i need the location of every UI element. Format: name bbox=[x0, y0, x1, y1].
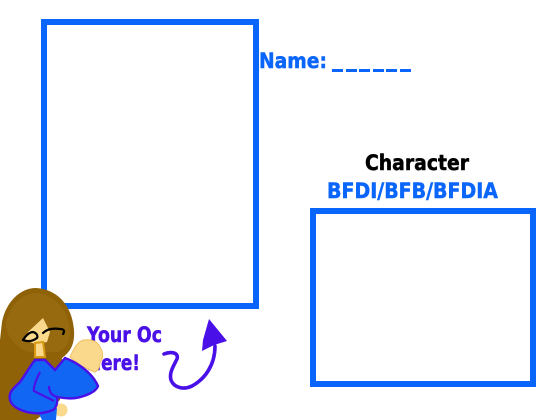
body bbox=[10, 358, 98, 413]
lower body bbox=[38, 408, 57, 420]
label: your oc here: Your Oc bbox=[86, 323, 162, 347]
hair bbox=[0, 288, 74, 420]
hair highlight bbox=[6, 293, 70, 352]
label: your oc here bbox=[86, 323, 162, 375]
panel: your OC frame bbox=[44, 22, 256, 306]
heading: character: Character bbox=[365, 151, 470, 175]
glasses and eyes bbox=[23, 329, 64, 341]
character: OC drawing bbox=[0, 288, 103, 420]
neck bbox=[35, 342, 45, 357]
arrow: pointing to frame bbox=[164, 319, 227, 388]
heading: show names: BFDI/BFB/BFDIA bbox=[327, 179, 499, 203]
name label: Name: bbox=[259, 49, 327, 73]
name blank line bbox=[332, 69, 411, 72]
panel: character frame bbox=[313, 211, 533, 384]
lower hand bbox=[54, 404, 68, 416]
sleeve lines bbox=[34, 372, 58, 401]
label: your oc here: Here! bbox=[87, 351, 140, 375]
face bbox=[25, 318, 50, 344]
upper hand bbox=[70, 340, 103, 372]
